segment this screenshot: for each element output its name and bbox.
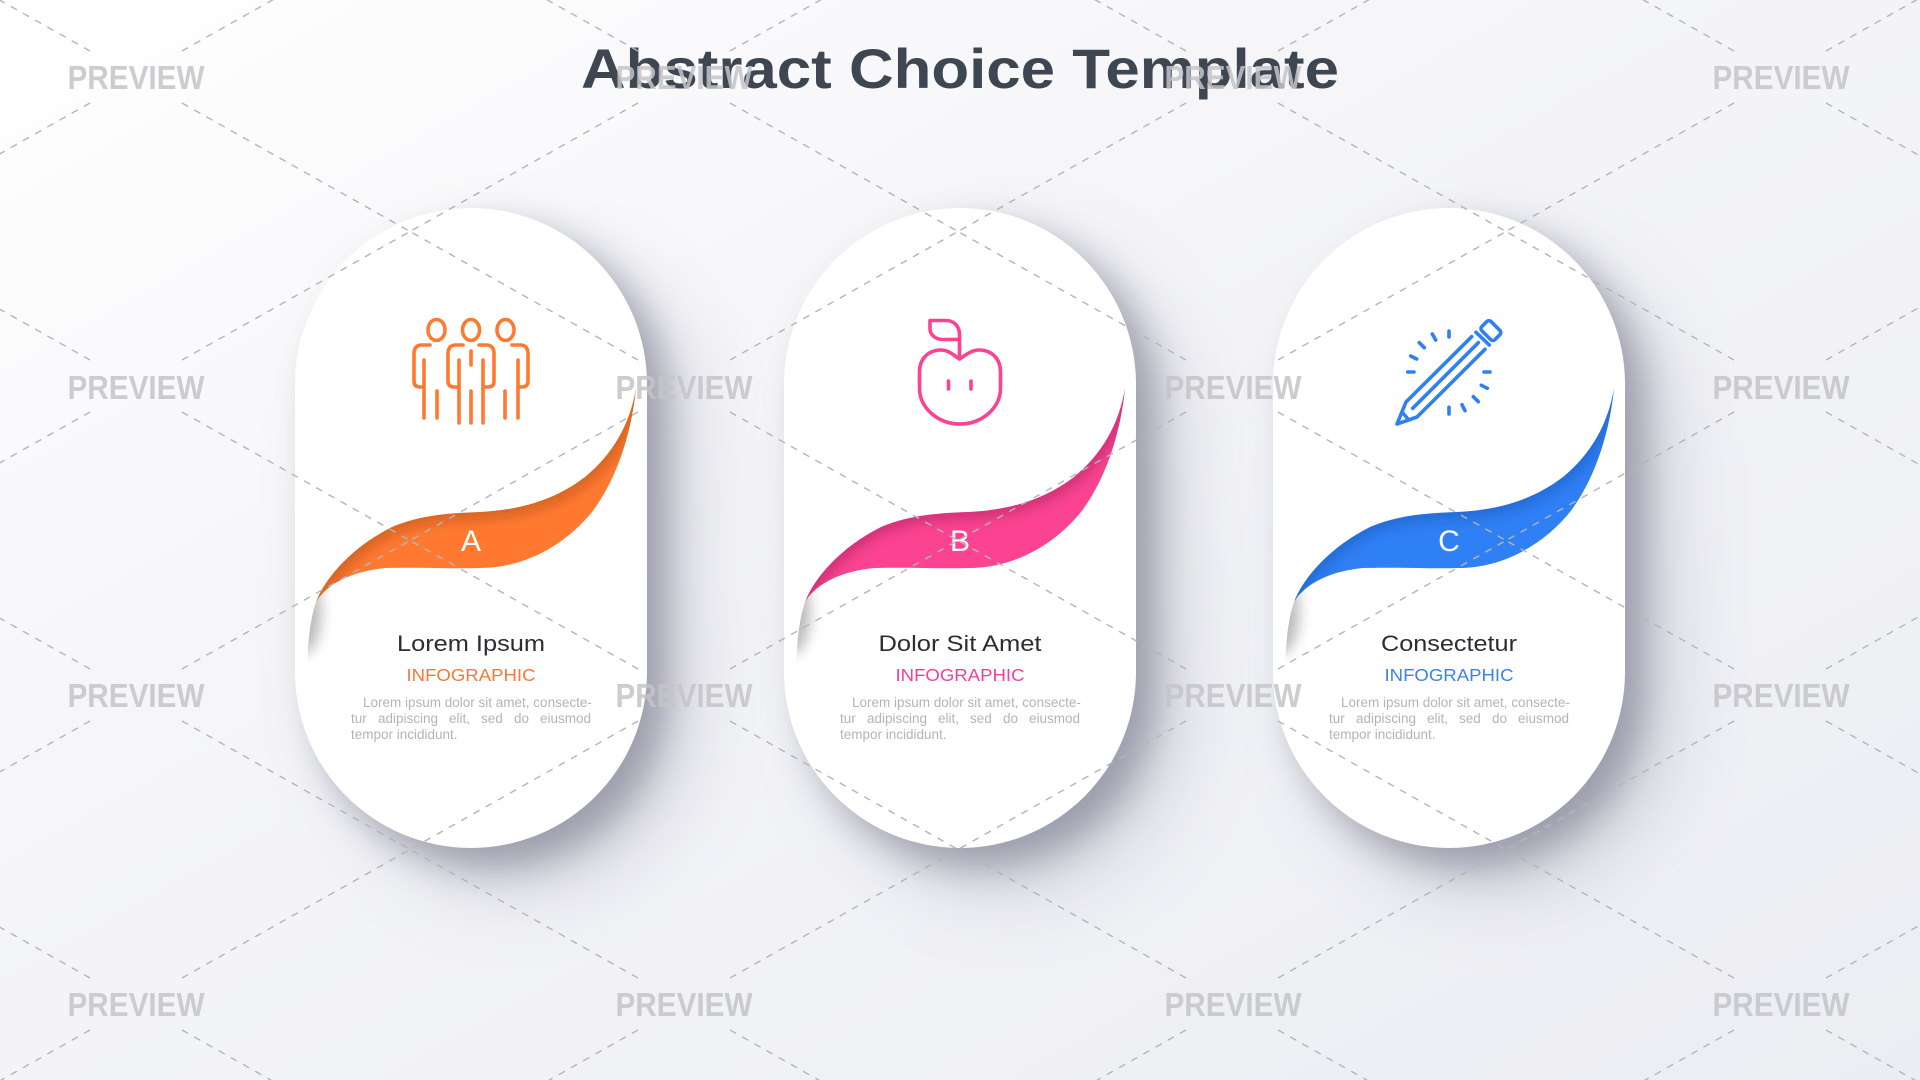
watermark text: PREVIEW (616, 986, 753, 1023)
card C body text: tur (1329, 711, 1345, 726)
watermark text: PREVIEW (1712, 59, 1850, 96)
card C body text: do (1492, 711, 1507, 726)
card B heading: Dolor Sit Amet (878, 631, 1042, 656)
panel: card A (285, 208, 692, 890)
card A heading: Lorem Ipsum (397, 631, 545, 656)
card A body text: tempor incididunt. (351, 727, 458, 742)
letter A: A (461, 525, 481, 558)
watermark text: PREVIEW (68, 59, 205, 96)
card B body text: Lorem ipsum dolor sit amet, consecte- (852, 695, 1081, 710)
watermark text: PREVIEW (68, 986, 205, 1023)
letter B: B (950, 525, 970, 558)
card C body text: eiusmod (1518, 711, 1569, 726)
panel: card B (774, 208, 1181, 890)
card A body text: tur (351, 711, 367, 726)
card B body text: sed (970, 711, 992, 726)
card A body text: do (514, 711, 529, 726)
watermark text: PREVIEW (1712, 986, 1850, 1023)
card A body text: eiusmod (540, 711, 591, 726)
card A body text: elit, (449, 711, 470, 726)
wave ribbon C (1263, 388, 1614, 654)
watermark text: PREVIEW (1164, 59, 1302, 96)
card C body text: adipiscing (1356, 711, 1416, 726)
card C body text: sed (1459, 711, 1481, 726)
panel: card C (1263, 208, 1670, 890)
card B body text: do (1003, 711, 1018, 726)
letter C: C (1438, 525, 1460, 558)
watermark text: PREVIEW (1712, 369, 1850, 406)
card B body text: adipiscing (867, 711, 927, 726)
icon: people (414, 320, 528, 423)
card B label: INFOGRAPHIC (896, 665, 1024, 685)
watermark text: PREVIEW (616, 677, 753, 714)
watermark text: PREVIEW (616, 369, 753, 406)
card C label: INFOGRAPHIC (1384, 665, 1514, 685)
watermark text: PREVIEW (1164, 986, 1302, 1023)
card A body text: sed (481, 711, 503, 726)
icon: pencil (1397, 319, 1502, 424)
card A body text: adipiscing (378, 711, 438, 726)
watermark text: PREVIEW (616, 59, 753, 96)
card C heading: Consectetur (1381, 631, 1517, 656)
title: Abstract Choice Template (581, 37, 1339, 100)
card B body text: tempor incididunt. (840, 727, 947, 742)
card C body text: Lorem ipsum dolor sit amet, consecte- (1341, 695, 1570, 710)
card C body text: elit, (1427, 711, 1448, 726)
watermark text: PREVIEW (1712, 677, 1850, 714)
card B body text: elit, (938, 711, 959, 726)
watermark text: PREVIEW (1164, 369, 1302, 406)
icon: apple (920, 320, 1000, 424)
card A label: INFOGRAPHIC (406, 665, 536, 685)
watermark text: PREVIEW (68, 369, 205, 406)
card C body text: tempor incididunt. (1329, 727, 1436, 742)
wave ribbon A (285, 388, 636, 654)
card B body text: tur (840, 711, 856, 726)
watermark text: PREVIEW (1164, 677, 1302, 714)
wave ribbon B (774, 388, 1125, 654)
card A body text: Lorem ipsum dolor sit amet, consecte- (363, 695, 592, 710)
watermark text: PREVIEW (68, 677, 205, 714)
card B body text: eiusmod (1029, 711, 1080, 726)
